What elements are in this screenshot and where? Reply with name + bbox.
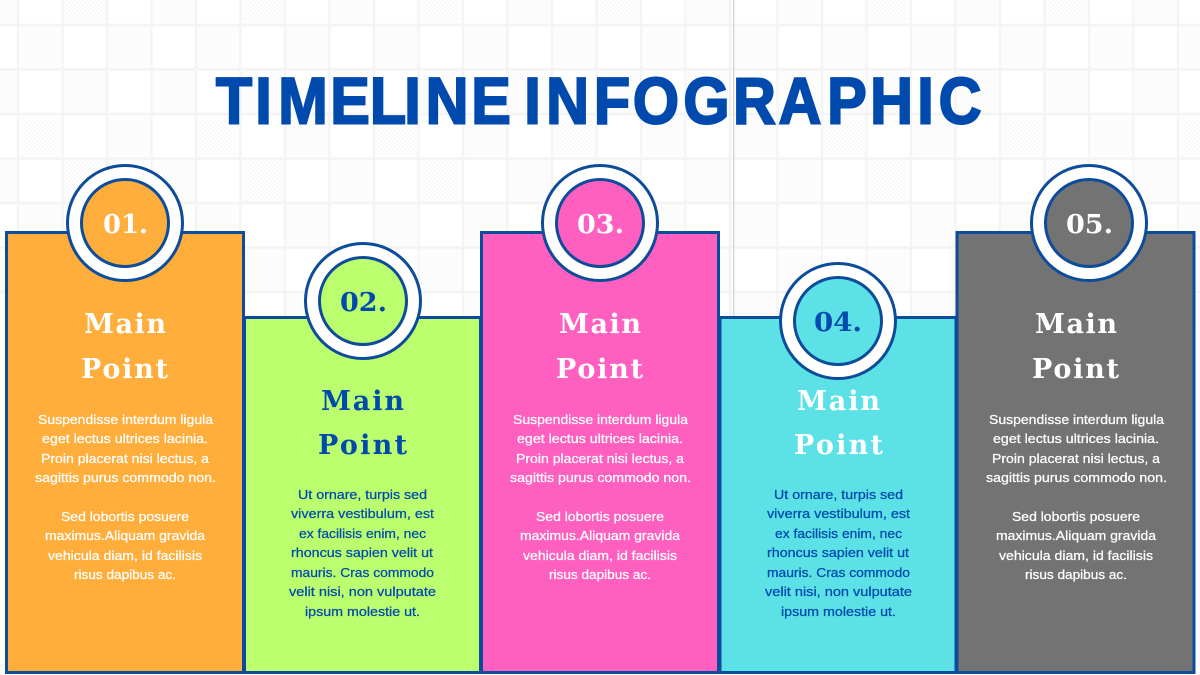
- text block: step 03 description: maximus.Aliquam gravida: [520, 529, 680, 543]
- text block: step 05 description: sagittis purus commodo non.: [986, 471, 1167, 485]
- badge: 02: [306, 244, 420, 358]
- heading: main point: Point: [1032, 354, 1120, 385]
- text block: step 05 description: risus dapibus ac.: [1025, 568, 1127, 582]
- text block: step 03 description: Sed lobortis posuere: [536, 510, 664, 524]
- panel: step 05: [957, 166, 1194, 672]
- heading: main point: [794, 386, 884, 461]
- text block: step 01 description: eget lectus ultrices lacinia.: [42, 432, 208, 446]
- text block: step 03 description: sagittis purus commodo non.: [510, 471, 691, 485]
- text block: step 03 description: eget lectus ultrices lacinia.: [517, 432, 683, 446]
- text block: step 02 description: ex facilisis enim, nec: [299, 527, 426, 541]
- heading: main point: Main: [1035, 309, 1117, 340]
- text block: step 02 description: ipsum molestie ut.: [305, 605, 420, 619]
- badge: 04: 04.: [814, 308, 862, 338]
- text block: step 04 description: Ut ornare, turpis sed: [774, 488, 903, 502]
- heading: main point: Point: [556, 354, 644, 385]
- badge: 05: [1032, 166, 1146, 280]
- text block: step 01 description: Suspendisse interdum ligula: [38, 413, 213, 427]
- text block: step 05 description: eget lectus ultrices lacinia.: [993, 432, 1159, 446]
- text block: step 03 description: [510, 413, 691, 582]
- text block: step 03 description: Proin placerat nisi lectus, a: [516, 452, 684, 466]
- text block: step 01 description: Proin placerat nisi lectus, a: [41, 452, 209, 466]
- heading: main point: Main: [84, 309, 166, 340]
- heading: main point: [556, 309, 644, 385]
- text block: step 01 description: Sed lobortis posuere: [61, 510, 189, 524]
- text block: step 04 description: ipsum molestie ut.: [781, 605, 896, 619]
- text block: step 02 description: rhoncus sapien velit ut: [291, 546, 434, 560]
- text block: step 01 description: sagittis purus commodo non.: [35, 471, 216, 485]
- text block: step 04 description: rhoncus sapien velit ut: [767, 546, 910, 560]
- text block: step 03 description: Suspendisse interdum ligula: [513, 413, 688, 427]
- text block: step 01 description: [35, 413, 216, 582]
- badge: 04: [780, 264, 896, 378]
- text block: step 02 description: viverra vestibulum, est: [291, 507, 435, 521]
- panel: step 04: [720, 264, 956, 672]
- text block: step 02 description: mauris. Cras commodo: [291, 566, 434, 580]
- text block: step 01 description: maximus.Aliquam gravida: [45, 529, 205, 543]
- text block: step 04 description: velit nisi, non vulputate: [765, 585, 912, 599]
- heading: main point: [81, 309, 169, 385]
- text block: step 03 description: vehicula diam, id facilisis: [523, 549, 677, 563]
- heading: main point: [318, 386, 408, 461]
- badge: 05: 05.: [1066, 210, 1113, 240]
- text block: step 05 description: Suspendisse interdum ligula: [989, 413, 1164, 427]
- badge: 02: 02.: [340, 288, 387, 318]
- badge: 03: [542, 166, 658, 280]
- text block: step 05 description: [986, 413, 1167, 582]
- text block: step 02 description: velit nisi, non vulputate: [289, 585, 436, 599]
- text block: step 04 description: [765, 488, 912, 619]
- text block: step 04 description: viverra vestibulum, est: [767, 507, 911, 521]
- badge: 03: 03.: [577, 210, 624, 240]
- text block: step 05 description: Proin placerat nisi lectus, a: [992, 452, 1160, 466]
- heading: main point: Point: [318, 430, 408, 461]
- panel: step 01: [6, 166, 244, 672]
- panel: step 03: [482, 166, 718, 672]
- text block: step 05 description: Sed lobortis posuere: [1012, 510, 1140, 524]
- badge: 01: 01.: [103, 210, 148, 240]
- text block: step 04 description: ex facilisis enim, nec: [775, 527, 902, 541]
- title: TIMELINE INFOGRAPHIC: [216, 65, 981, 138]
- text block: step 05 description: maximus.Aliquam gravida: [996, 529, 1156, 543]
- text block: step 03 description: risus dapibus ac.: [549, 568, 651, 582]
- heading: main point: Point: [81, 354, 169, 385]
- heading: main point: Main: [559, 309, 641, 340]
- text block: step 02 description: Ut ornare, turpis sed: [298, 488, 427, 502]
- heading: main point: [1032, 309, 1120, 385]
- badge: 01: [68, 166, 182, 280]
- panel: step 02: [244, 244, 480, 672]
- text block: step 01 description: risus dapibus ac.: [74, 568, 176, 582]
- text block: step 01 description: vehicula diam, id facilisis: [48, 549, 202, 563]
- text block: step 04 description: mauris. Cras commodo: [767, 566, 910, 580]
- text block: step 02 description: [289, 488, 436, 619]
- heading: main point: Point: [794, 430, 884, 461]
- heading: main point: Main: [797, 386, 880, 417]
- heading: main point: Main: [321, 386, 404, 417]
- text block: step 05 description: vehicula diam, id facilisis: [999, 549, 1153, 563]
